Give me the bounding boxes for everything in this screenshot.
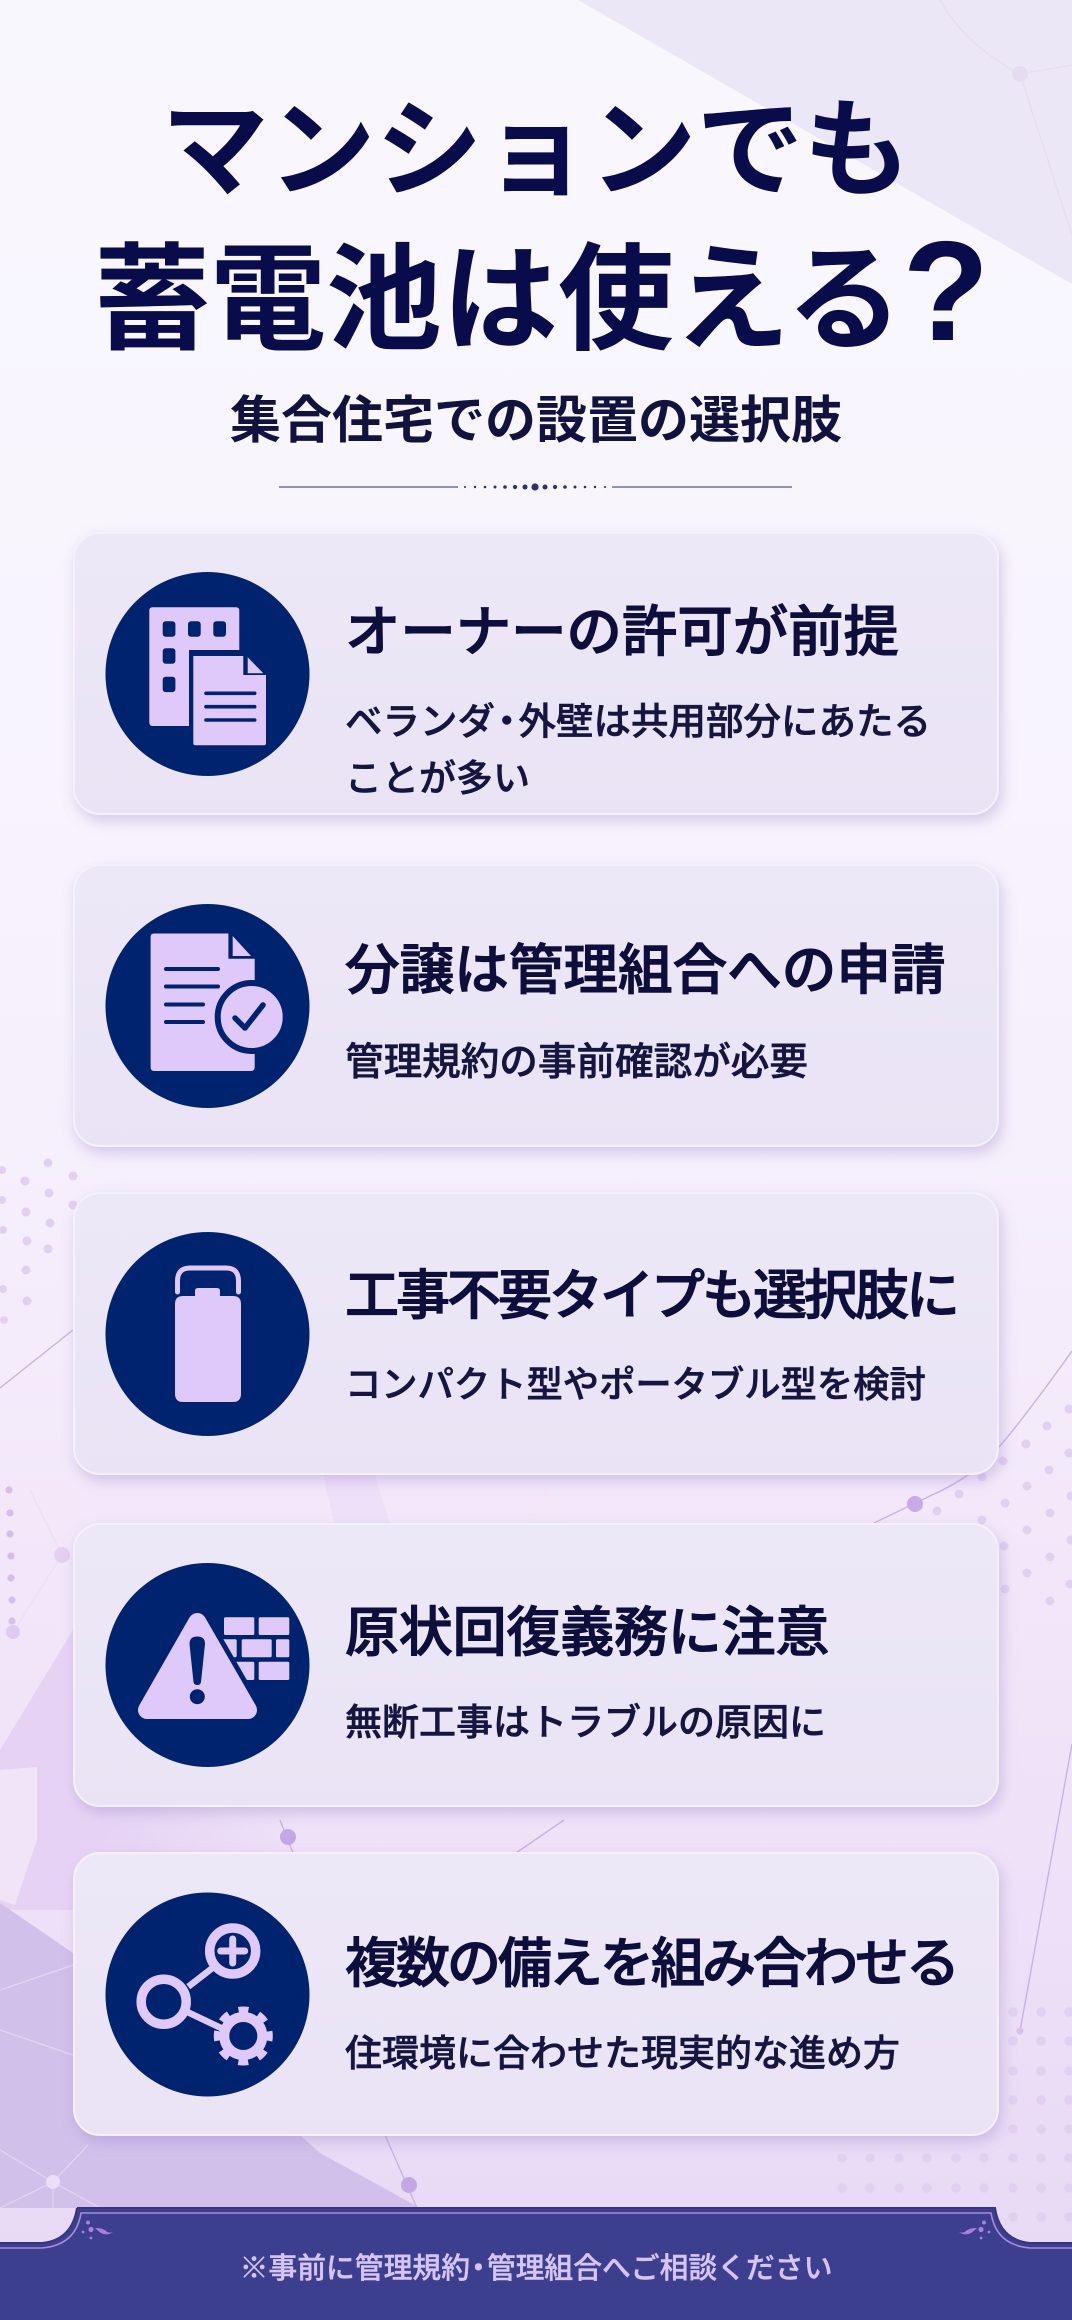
icon: document with check mark bbox=[106, 904, 310, 1108]
panel: owner permission bbox=[74, 533, 998, 814]
description: コンパクト型やポータブル型を検討 bbox=[345, 1364, 926, 1405]
title: マンションでも bbox=[161, 90, 911, 210]
heading: 複数の備えを組み合わせる bbox=[345, 1934, 957, 1994]
divider bbox=[279, 483, 792, 491]
ornament: right bbox=[959, 2220, 990, 2239]
description: 無断工事はトラブルの原因に bbox=[345, 1702, 826, 1743]
ornament: left bbox=[82, 2220, 113, 2239]
icon: building and document bbox=[106, 572, 310, 776]
icon: warning triangle and brick wall bbox=[106, 1563, 310, 1767]
panel: condominium application bbox=[74, 865, 998, 1146]
description bbox=[345, 700, 931, 799]
heading: 分譲は管理組合への申請 bbox=[345, 940, 946, 1001]
panel: combine preparations bbox=[74, 1853, 998, 2135]
description: ベランダ・外壁は共用部分にあたる bbox=[345, 700, 931, 742]
icon: connected nodes with plus and gear bbox=[106, 1892, 310, 2096]
description: 住環境に合わせた現実的な進め方 bbox=[345, 2033, 900, 2074]
subtitle: 集合住宅での設置の選択肢 bbox=[230, 392, 842, 449]
description: ことが多い bbox=[345, 758, 530, 799]
title: 蓄電池は使える? bbox=[94, 212, 989, 371]
heading: 原状回復義務に注意 bbox=[345, 1603, 829, 1663]
panel: no-construction type bbox=[74, 1193, 998, 1474]
footer note: ※事前に管理規約・管理組合へご相談ください bbox=[240, 2253, 832, 2285]
description: 管理規約の事前確認が必要 bbox=[345, 1041, 808, 1084]
footer banner bbox=[0, 2208, 1072, 2320]
heading: 工事不要タイプも選択肢に bbox=[345, 1266, 957, 1326]
icon: portable battery bbox=[106, 1232, 310, 1436]
heading: オーナーの許可が前提 bbox=[345, 601, 899, 663]
panel: restoration duty bbox=[74, 1524, 998, 1806]
title bbox=[94, 90, 989, 371]
